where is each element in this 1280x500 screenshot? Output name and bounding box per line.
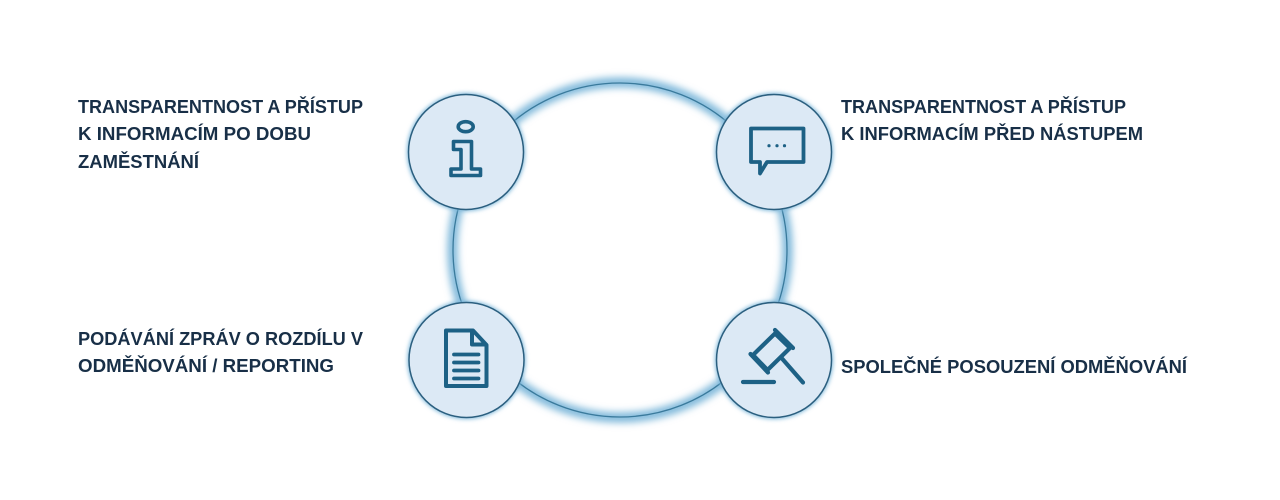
node: gavel — [715, 301, 833, 419]
text: top right label: TRANSPARENTNOST A PŘÍSTUP — [841, 96, 1126, 117]
text: top left label — [78, 96, 363, 172]
text: top right label — [841, 96, 1143, 144]
icon: info — [451, 122, 480, 176]
node: information — [407, 93, 525, 211]
text: bottom left label: ODMĚŇOVÁNÍ / REPORTING — [78, 355, 334, 376]
node: chat — [715, 93, 833, 211]
text: bottom right label: SPOLEČNÉ POSOUZENÍ ODMĚŇOVÁNÍ — [841, 356, 1188, 377]
text: top left label: TRANSPARENTNOST A PŘÍSTUP — [78, 96, 363, 117]
icon: speech bubble — [751, 128, 804, 174]
text: bottom left label: PODÁVÁNÍ ZPRÁV O ROZDÍLU V — [78, 328, 363, 349]
text: bottom left label — [78, 328, 363, 376]
text: top right label: K INFORMACÍM PŘED NÁSTUPEM — [841, 123, 1143, 144]
icon: gavel — [743, 330, 803, 382]
icon: document — [446, 330, 486, 386]
connecting ring — [452, 82, 788, 418]
node: document — [408, 301, 526, 419]
text: top left label: K INFORMACÍM PO DOBU — [78, 123, 311, 144]
text: top left label: ZAMĚSTNÁNÍ — [78, 151, 200, 172]
